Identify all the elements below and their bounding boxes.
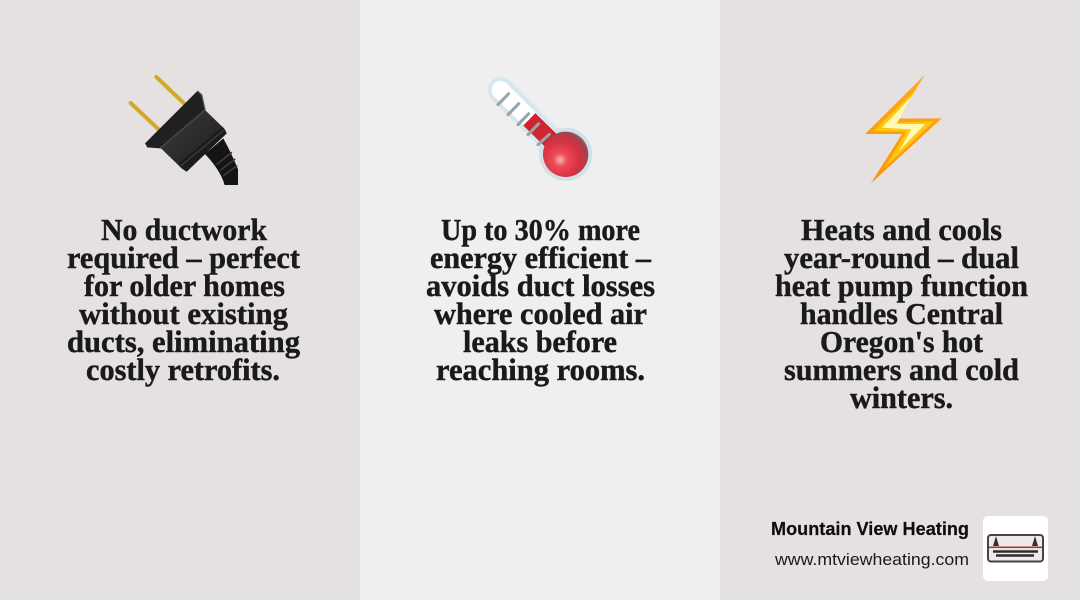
icon: thermometer — [498, 90, 592, 181]
text block: energy efficient: leaks before — [463, 324, 617, 359]
icon: electric plug — [131, 77, 240, 187]
text block: energy efficient: Up to 30% more — [441, 212, 640, 247]
text block: no ductwork: ducts, eliminating — [67, 324, 300, 359]
text block: year-round: heat pump function — [775, 268, 1028, 303]
panel: middle background — [360, 0, 720, 600]
text block: year-round: winters. — [850, 380, 953, 415]
text block: year-round: year-round – dual — [784, 240, 1019, 275]
footer: website: www.mtviewheating.com — [774, 550, 969, 569]
text block: energy efficient: avoids duct losses — [426, 268, 655, 303]
text block: year-round: Heats and cools — [801, 212, 1002, 247]
text block: energy efficient — [426, 212, 655, 387]
text block: year-round: handles Central — [800, 296, 1003, 331]
panel: left background — [0, 0, 360, 600]
text block: energy efficient: where cooled air — [434, 296, 647, 331]
text block: no ductwork: without existing — [79, 296, 288, 331]
text block: energy efficient: reaching rooms. — [436, 352, 645, 387]
text block: no ductwork: costly retrofits. — [86, 352, 280, 387]
text block: no ductwork: No ductwork — [101, 212, 268, 247]
panel: right background — [720, 0, 1080, 600]
text block: no ductwork — [67, 212, 301, 387]
footer: brand name: Mountain View Heating — [771, 519, 969, 539]
text block: energy efficient: energy efficient – — [430, 240, 651, 275]
text block: year-round: Oregon's hot — [820, 324, 984, 359]
logo badge — [983, 516, 1048, 581]
text block: no ductwork: required – perfect — [67, 240, 301, 275]
text block: year-round — [775, 212, 1028, 415]
icon: lightning bolt — [865, 75, 942, 184]
text block: year-round: summers and cold — [784, 352, 1019, 387]
text block: no ductwork: for older homes — [84, 268, 285, 303]
